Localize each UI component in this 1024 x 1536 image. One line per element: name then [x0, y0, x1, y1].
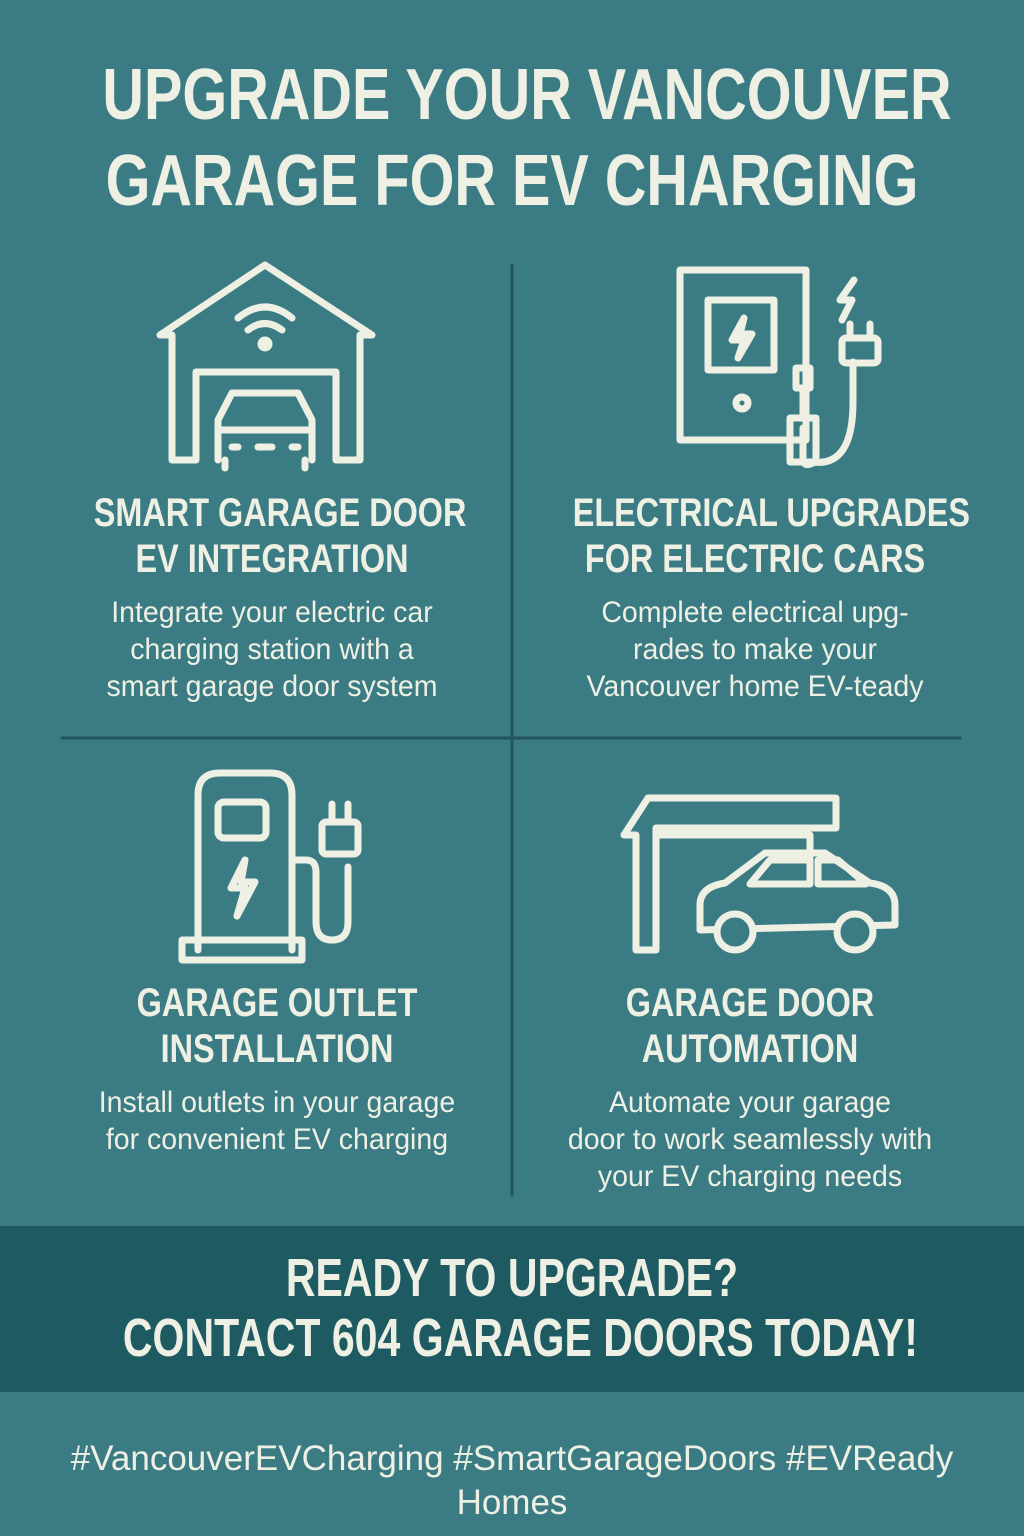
- panel: smart garage door: charging station with a: [130, 633, 414, 666]
- panel: garage outlet: GARAGE OUTLET: [137, 981, 417, 1025]
- panel: electrical upgrades: rades to make your: [633, 633, 877, 666]
- panel: automation: [568, 981, 932, 1193]
- hashtags: #VancouverEVCharging #SmartGarageDoors #EVReady: [71, 1439, 953, 1478]
- banner: call to action: READY TO UPGRADE?: [286, 1248, 738, 1308]
- hashtags: [70, 1439, 954, 1522]
- panel: garage outlet: for convenient EV charging: [106, 1123, 448, 1156]
- panel: automation: your EV charging needs: [598, 1160, 902, 1193]
- icon: garage door with car: [624, 798, 895, 950]
- hashtags: Homes: [457, 1483, 567, 1522]
- icon: charging station: [182, 773, 358, 960]
- panel: electrical upgrades: Vancouver home EV-teady: [587, 670, 923, 703]
- panel: garage outlet: [99, 981, 455, 1156]
- panel: smart garage door: [94, 491, 466, 703]
- panel: automation: door to work seamlessly with: [568, 1123, 932, 1156]
- panel: smart garage door: smart garage door system: [106, 670, 438, 703]
- panel: automation: Automate your garage: [609, 1086, 891, 1119]
- title: [102, 55, 952, 221]
- icon: smart garage: [160, 265, 372, 468]
- panel: smart garage door: Integrate your electric car: [111, 596, 433, 629]
- panel: smart garage door: EV INTEGRATION: [135, 537, 409, 581]
- banner: call to action: CONTACT 604 GARAGE DOORS TODAY!: [123, 1308, 918, 1368]
- panel: smart garage door: SMART GARAGE DOOR: [94, 491, 466, 535]
- title: UPGRADE YOUR VANCOUVER: [102, 55, 952, 135]
- panel: electrical upgrades: [573, 491, 970, 703]
- panel: electrical upgrades: Complete electrical upg-: [601, 596, 909, 629]
- panel: automation: AUTOMATION: [642, 1027, 858, 1071]
- title: GARAGE FOR EV CHARGING: [106, 141, 918, 221]
- icon: electrical panel: [680, 270, 878, 465]
- banner: call to action: [0, 1226, 1024, 1392]
- panel: electrical upgrades: FOR ELECTRIC CARS: [585, 537, 925, 581]
- panel: garage outlet: Install outlets in your garage: [99, 1086, 455, 1119]
- panel: electrical upgrades: ELECTRICAL UPGRADES: [573, 491, 970, 535]
- panel: garage outlet: INSTALLATION: [161, 1027, 393, 1071]
- panel: automation: GARAGE DOOR: [626, 981, 874, 1025]
